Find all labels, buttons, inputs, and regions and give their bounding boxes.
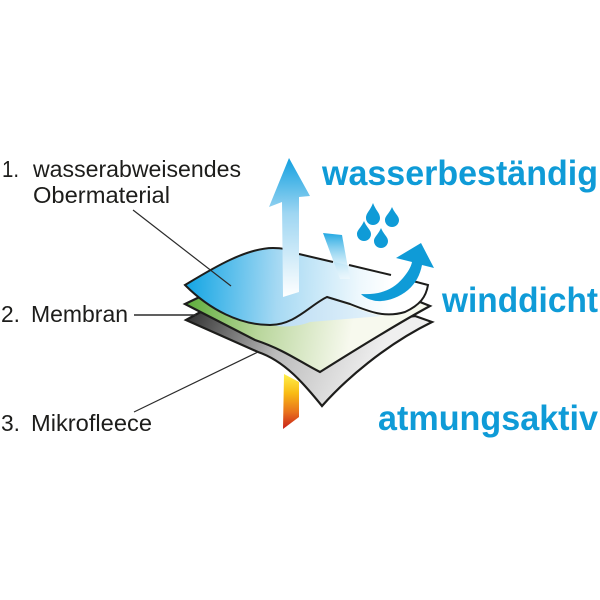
label 1: wasserabweisendes Obermaterial: wasserabweisendes: [32, 156, 241, 182]
arrow: vapour rising upward: [269, 158, 310, 297]
heading: atmungsaktiv: atmungsaktiv: [378, 399, 599, 438]
label 3: Mikrofleece: Mikrofleece: [31, 410, 152, 436]
label 1: wasserabweisendes Obermaterial: 1.: [2, 156, 19, 182]
layer 1: Obermaterial (blue): [185, 248, 428, 325]
icon: heat flame strip: [283, 374, 299, 429]
leader line 3: [134, 352, 258, 412]
layer 2: Membran (green): [185, 292, 430, 372]
label 2: Membran: 2.: [1, 301, 20, 327]
label 1: wasserabweisendes Obermaterial: [2, 156, 241, 208]
label 2: Membran: Membran: [31, 301, 128, 327]
arrow: wind deflected: [361, 243, 434, 301]
label 3: Mikrofleece: 3.: [1, 410, 20, 436]
layer 1 outline: [185, 248, 428, 325]
arrow: incoming water fragment: [323, 233, 350, 279]
layer 3: Mikrofleece (gray): [186, 304, 432, 406]
leader line 1: [133, 210, 231, 286]
heading: wasserbeständig: wasserbeständig: [321, 154, 598, 193]
label 1: wasserabweisendes Obermaterial: Obermaterial: [33, 182, 170, 208]
icon: water drops: [357, 203, 399, 248]
layer 1 lower sheet tint: [270, 297, 382, 326]
leader line 2: [134, 314, 196, 316]
